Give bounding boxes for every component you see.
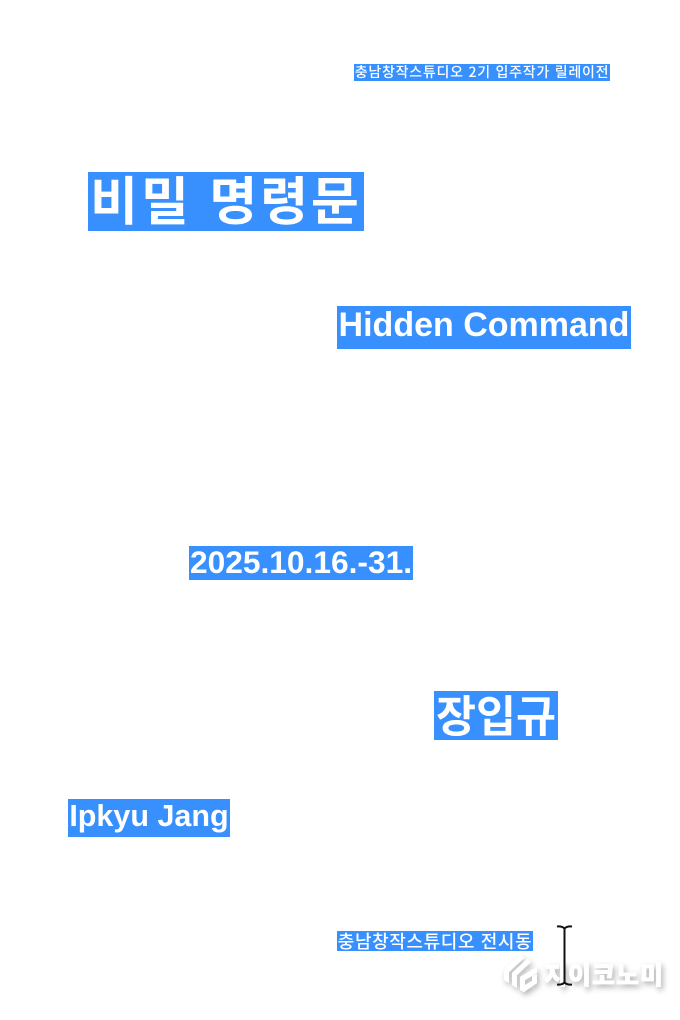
- exhibition dates: 2025.10.16.-31.: [190, 544, 412, 580]
- artist name: English: Ipkyu Jang: [69, 799, 229, 833]
- artist name: Korean: 장입규: [436, 682, 556, 745]
- watermark: [502, 956, 666, 998]
- title: Korean: 비밀 명령문: [90, 160, 362, 235]
- watermark text: 지이코노미: [544, 956, 664, 992]
- watermark logo: [504, 955, 537, 992]
- title: English: Hidden Command: [339, 306, 629, 344]
- icon: text cursor: [556, 925, 572, 986]
- venue: 충남창작스튜디오 전시동: [338, 928, 532, 954]
- subtitle: relay exhibition: 충남창작스튜디오 2기 입주작가 릴레이전: [355, 62, 609, 82]
